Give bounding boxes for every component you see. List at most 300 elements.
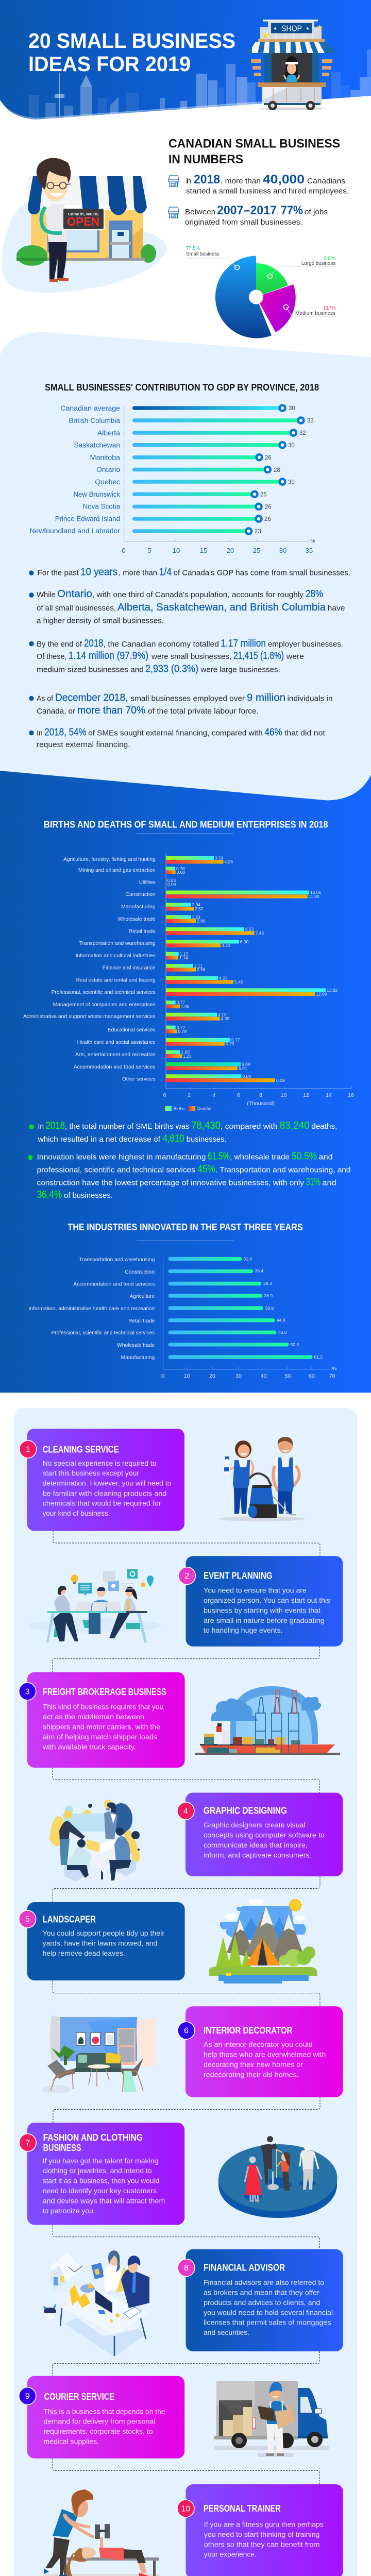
card text: business by starting with events that (204, 1606, 321, 1614)
bar chart: GDP by province: 5 (147, 547, 151, 554)
bar chart: births and deaths: 2 (188, 1092, 191, 1098)
card text: help those who are overwhelmed with (204, 2050, 326, 2058)
card text: requirements, corporate stocks, to (43, 2428, 153, 2435)
number badge 10 (177, 2500, 194, 2517)
illustration: man with open sign at store (2, 158, 167, 293)
bar chart: GDP by province: 26 (264, 516, 271, 522)
bullet: GDP from small businesses: of Canada's GDP has come from small businesses. (174, 568, 350, 577)
card text (204, 2279, 333, 2336)
card text: Graphic designers create visual (204, 1821, 305, 1829)
card text: inform, and captivate consumers. (204, 1851, 311, 1859)
bullet: external financing: 2018, 54% (44, 726, 87, 738)
card text: redecorating their old homes. (204, 2071, 299, 2078)
number badge 4 (177, 1802, 194, 1820)
bullet: innovation levels: construction have the lowest percentage of innovative businesses, with only (37, 1179, 305, 1187)
bar chart: GDP by province: 30 (289, 405, 295, 412)
bar chart: births and deaths: 5.91 (239, 1065, 247, 1071)
card title: INTERIOR DECORATOR (204, 2025, 293, 2036)
bullet: employer businesses: were large businesses. (200, 666, 280, 674)
bullet: SME births and deaths: , compared with (221, 1122, 278, 1131)
legend: small business: 77.5% (186, 245, 200, 251)
bullet: GDP from small businesses: 10 years (80, 566, 117, 578)
bar chart: births and deaths: (Thousand) (247, 1100, 275, 1107)
bar chart: GDP by province: 0 (122, 547, 126, 554)
card text: to handling huge events. (204, 1626, 282, 1634)
bullet: external financing: 46% (264, 726, 282, 738)
bullet: SME births and deaths: deaths, (311, 1122, 337, 1131)
bar chart: births and deaths: 12 (303, 1092, 309, 1098)
legend: births and deaths: Deaths (197, 1106, 211, 1111)
bar chart: births and deaths: 0.77 (231, 1037, 240, 1042)
card text: medical supplies. (43, 2438, 99, 2446)
text: 2018 stat: Canadians (307, 177, 345, 185)
text: 2007-2017 stat: 2007–2017 (217, 204, 277, 217)
bullet: external financing: In (37, 728, 43, 737)
bullet: innovation levels: Innovation levels were highest in manufacturing (37, 1153, 206, 1162)
bar chart: industries innovated: 44.9 (277, 1318, 285, 1323)
bar chart: births and deaths: Finance and insurance (103, 965, 156, 971)
text: 2007-2017 stat: 77% (281, 204, 303, 217)
bullet: Ontario density: While (37, 590, 56, 599)
bar chart: births and deaths: Administrative and support waste management services (23, 1013, 156, 1020)
bar chart: births and deaths: 1.15 (180, 951, 189, 956)
number badge 8 (178, 2259, 195, 2277)
bullet: innovation levels: of businesses. (64, 1191, 113, 1200)
bullet: employment (29, 692, 333, 716)
bar chart: births and deaths: 6.04 (242, 1062, 250, 1067)
bar chart: GDP by province: 32 (299, 430, 306, 436)
bar chart: industries innovated: Construction (125, 1269, 155, 1275)
bar chart: births and deaths: 0.04 (167, 882, 176, 887)
heading: Canadian small business in numbers: CANADIAN SMALL BUSINESS (168, 137, 340, 150)
bar chart: industries innovated: Manufacturing (121, 1354, 155, 1361)
bar chart: births and deaths: 4.39 (221, 1016, 229, 1021)
skyline (0, 49, 371, 120)
bar chart: industries innovated: 38.9 (264, 1293, 273, 1298)
bullet: innovation levels: , wholesale trade (230, 1153, 290, 1162)
text: 2007-2017 stat: originated from small businesses. (185, 218, 302, 227)
bullet: employment: small businesses employed over (131, 694, 245, 703)
number badge 10: 10 (181, 2505, 191, 2513)
bar chart: births and deaths: 7.43 (256, 930, 264, 936)
number badge 5: 5 (25, 1916, 30, 1924)
bar chart: births and deaths: Real estate and rental and leasing (76, 977, 156, 984)
bar chart: births and deaths: 2.52 (195, 906, 204, 911)
heading: industries innovated: THE INDUSTRIES INNOVATED IN THE PAST THREE YEARS (68, 1222, 303, 1232)
text: 2018 stat: , more than (221, 177, 261, 185)
bar chart: births and deaths: Agriculture, forestry, fishing and hunting (63, 856, 156, 862)
card text: If you have got the talent for making (43, 2157, 159, 2165)
bullet: innovation levels: 50.5% (292, 1151, 317, 1162)
bullet: employer businesses: Of these, (37, 652, 67, 661)
card text: as brokers and mean that they offer (204, 2289, 320, 2296)
bullet: employer businesses: medium-sized businesses and (37, 666, 144, 674)
card title: PERSONAL TRAINER (204, 2503, 281, 2514)
bullet: external financing: request external financing. (37, 740, 130, 749)
card text: determination. However, you will need to (43, 1480, 171, 1487)
text: 2018 stat: In (186, 177, 191, 185)
bullet: Ontario density: have (328, 604, 345, 613)
bullet: SME births and deaths: In (38, 1122, 44, 1131)
heading: births and deaths: BIRTHS AND DEATHS OF SMALL AND MEDIUM ENTERPRISES IN 2018 (44, 819, 328, 829)
bar chart: GDP by province: 15 (200, 547, 207, 554)
illustration: graphic design team (49, 1800, 140, 1882)
bullet: employer businesses: 2,933 (0.3%) (145, 664, 198, 675)
bar chart: births and deaths: Mining and oil and gas extraction (78, 867, 156, 873)
number badge 6: 6 (184, 2027, 189, 2036)
card text: demand for delivery from personal (43, 2417, 156, 2426)
card title: GRAPHIC DESIGNING (204, 1805, 287, 1816)
bullet: innovation levels: 36.4% (37, 1189, 62, 1200)
card text: with available truck capacity. (42, 1743, 136, 1751)
bar chart: births and deaths: Accommodation and food services (74, 1064, 156, 1070)
card text: are small in nature before graduating (204, 1617, 325, 1624)
text: 2007-2017 stat: , (277, 208, 279, 216)
number badge 3: 3 (25, 1687, 30, 1696)
card text: shippers and motor carriers, with the (43, 1723, 160, 1731)
bar chart: GDP by province: 33 (307, 418, 314, 424)
bar chart: GDP by province: Prince Edward Island (55, 515, 120, 522)
bar chart: industries innovated: Retail trade (128, 1318, 155, 1324)
bar chart: births and deaths: Educational services (108, 1027, 156, 1033)
card title: CLEANING SERVICE (43, 1445, 119, 1455)
bar chart: births and deaths: 1.06 (181, 1049, 190, 1055)
illustration: freight port with ship and cranes (195, 1686, 340, 1755)
number badge 9 (19, 2387, 36, 2405)
legend: large business: 8.8% (324, 256, 335, 262)
bullet: SME births and deaths (29, 1120, 337, 1144)
legend: large business (301, 256, 335, 266)
bar chart: industries innovated: 45.0 (278, 1330, 287, 1335)
bar chart: births and deaths: 2.04 (192, 902, 200, 907)
bullet: external financing: of SMEs sought external financing, compared with (88, 728, 263, 737)
number badge 1 (20, 1440, 37, 1458)
card text: help remove dead leaves. (43, 1950, 125, 1957)
bullet: Ontario density: Ontario (57, 588, 92, 600)
bar chart: GDP by province: Saskatchewan (74, 441, 120, 449)
card text: licenses that permit sales of mortgages (204, 2319, 331, 2327)
card 7: fashion and clothing (19, 2123, 184, 2225)
card text: to patronize you. (43, 2207, 95, 2215)
legend: medium business: Medium business (295, 310, 335, 316)
bar chart: births and deaths: 14 (326, 1092, 332, 1098)
bar chart: births and deaths: 1.23 (183, 1054, 192, 1059)
bar chart: births and deaths: 0.80 (176, 870, 185, 875)
header banner (0, 0, 371, 120)
bar chart: births and deaths: Information and cultural industries (76, 953, 156, 959)
bar chart: births and deaths: 0.79 (178, 1029, 187, 1034)
bar chart: GDP by province (30, 404, 315, 554)
bar chart: industries innovated: 50.5 (291, 1342, 299, 1347)
bar chart: births and deaths: 4.30 (222, 943, 230, 948)
card title: FINANCIAL ADVISOR (204, 2262, 285, 2273)
card text: be familiar with cleaning products and (43, 1489, 166, 1497)
bullet: employment: December 2018, (55, 692, 128, 703)
icon: store 1 (168, 176, 179, 187)
card title (43, 2132, 143, 2153)
card text: need to identify your key customers (43, 2187, 157, 2195)
bar chart: industries innovated: 40 (261, 1373, 267, 1379)
bullet: employer businesses: employer businesses. (268, 640, 343, 649)
text: 2018 stat: started a small business and hired employees. (186, 187, 349, 196)
bullet: innovation levels: and (319, 1153, 333, 1162)
illustration: landscape with tent (209, 1899, 317, 1984)
card text: This is a business that depends on the (43, 2408, 165, 2415)
card text: communicate ideas that inspire, (204, 1841, 308, 1849)
bullet: employer businesses: By the end of (37, 640, 82, 649)
title: IDEAS FOR 2019 (28, 52, 191, 76)
bullet: employment: 9 million (247, 692, 285, 703)
bullet: employer businesses: 21,415 (1.8%) (233, 650, 284, 662)
card title: EVENT PLANNING (204, 1571, 272, 1581)
card 4: graphic designing (177, 1793, 343, 1876)
bullet: SME births and deaths: businesses. (187, 1135, 227, 1144)
bar chart: births and deaths: 6 (237, 1092, 240, 1098)
bar chart: industries innovated: 30 (235, 1373, 242, 1379)
text: 2018 stat: 40,000 (263, 173, 305, 187)
bullet: employment: As of (37, 694, 54, 703)
bullet: innovation levels: professional, scientific and technical services (37, 1166, 195, 1175)
illustration: living room (42, 2015, 156, 2093)
bar chart: GDP by province: 23 (255, 529, 261, 535)
bar chart: GDP by province: 10 (173, 547, 180, 554)
bar chart: GDP by province: Manitoba (90, 453, 121, 462)
bar chart: births and deaths: 0 (163, 1092, 166, 1098)
bar chart: births and deaths (23, 853, 354, 1111)
legend: medium business (295, 305, 335, 316)
bar chart: births and deaths: Arts, entertainment and recreation (75, 1052, 156, 1058)
card text (43, 2408, 165, 2446)
bullet: Ontario density (29, 588, 345, 625)
legend: births and deaths (165, 1106, 211, 1111)
bar chart: GDP by province: 26 (265, 455, 272, 461)
number badge 8: 8 (184, 2264, 189, 2273)
bullet: Ontario density: Alberta, Saskatchewan, and British Columbia (117, 602, 326, 613)
bar chart: births and deaths: Other services (122, 1076, 156, 1082)
bar chart: industries innovated: Accommodation and food services (73, 1281, 155, 1287)
illustration: tailor on platform (218, 2136, 337, 2218)
title (28, 29, 235, 76)
bar chart: GDP by province: Ontario (96, 466, 120, 473)
bar chart: births and deaths: 13.82 (327, 988, 338, 993)
bullet: employer businesses: were (286, 652, 304, 661)
bar chart: births and deaths: 12.69 (316, 991, 327, 996)
title: 20 SMALL BUSINESS (28, 29, 235, 53)
card text (43, 1460, 171, 1517)
bar chart: industries innovated: 61.5 (314, 1354, 323, 1360)
card text: clothing or jewelries, and intend to (43, 2167, 152, 2175)
bar chart: GDP by province: Quebec (95, 478, 120, 486)
bar chart: GDP by province: Canadian average (60, 404, 120, 412)
card text: start this business except your (43, 1469, 140, 1477)
illustration: man with open sign at store: Come in, WE'RE (68, 212, 99, 216)
bar chart: births and deaths: Professional, scientific and technical services (52, 989, 156, 995)
card text: start it as a business, then you would (43, 2177, 159, 2185)
card 1: cleaning service (20, 1429, 184, 1531)
bar chart: births and deaths: 0.09 (276, 1078, 285, 1083)
bar chart: industries innovated: % (332, 1366, 337, 1372)
bullet: Ontario density: a higher density of small businesses. (37, 616, 164, 625)
text: 2018 stat: 2018 (194, 173, 220, 187)
bullet: SME births and deaths: 83,240 (280, 1120, 310, 1131)
bullet: Ontario density: of all small businesses, (37, 604, 116, 613)
bar chart: industries innovated: Agriculture (130, 1293, 155, 1299)
bullet: SME births and deaths: which resulted in a net decrease of (37, 1135, 161, 1144)
bullet: GDP from small businesses: For the past (37, 568, 79, 577)
card text: concepts using computer software to (204, 1832, 325, 1839)
bar chart: industries innovated: Information, administrative health care and recreation (29, 1306, 155, 1312)
bar chart: industries innovated: 10 (184, 1373, 190, 1379)
bar chart: industries innovated: 50 (285, 1373, 291, 1379)
card text: and securities. (204, 2329, 249, 2336)
pie chart (186, 245, 335, 338)
bar chart: GDP by province: 30 (288, 443, 295, 449)
bar chart: births and deaths: 0.77 (177, 1000, 185, 1005)
bar chart: industries innovated: 70 (329, 1373, 335, 1379)
bullet: employment: more than 70% (77, 705, 146, 716)
bar chart: births and deaths: 5.45 (234, 979, 243, 985)
bullet: employer businesses: 1.17 million (221, 638, 266, 649)
bullet: SME births and deaths: , the total number of SME births was (65, 1122, 189, 1131)
bar chart: births and deaths: 6.00 (240, 939, 249, 944)
number badge 3 (19, 1683, 36, 1700)
card text: and devise ways that will attract them (43, 2197, 165, 2205)
card text: decorating their new homes or (204, 2061, 303, 2069)
card 2: event planning (178, 1556, 343, 1647)
card text: your experience. (204, 2551, 257, 2558)
bar chart: births and deaths: 4.26 (225, 859, 233, 865)
card 10: personal trainer (177, 2484, 343, 2576)
connectors between idea cards (53, 1531, 320, 2576)
bullet: employer businesses (29, 638, 343, 675)
bar chart: births and deaths: 0.03 (167, 878, 176, 883)
bullet: GDP from small businesses (29, 566, 350, 578)
number badge 7 (19, 2134, 36, 2151)
bar chart: GDP by province: 20 (227, 547, 234, 554)
card text: others so that they can benefit from (204, 2540, 319, 2548)
bar chart: births and deaths: 10 (281, 1092, 287, 1098)
bar chart: industries innovated: Professional, scientific and technical services (52, 1330, 155, 1336)
card text: you need to start thinking of training (204, 2531, 319, 2538)
bullet: innovation levels: 45% (197, 1164, 215, 1175)
icon: shop kiosk: SHOP (281, 25, 302, 33)
bar chart: births and deaths: 2.01 (192, 914, 201, 920)
card 9: courier service (19, 2376, 184, 2459)
bar chart: industries innovated: 39.9 (265, 1306, 274, 1311)
card title: BUSINESS (43, 2143, 81, 2153)
number badge 2 (178, 1567, 195, 1585)
card text (42, 1703, 163, 1751)
bullet: GDP from small businesses: 1/4 (159, 566, 172, 578)
bar chart: GDP by province: 30 (288, 479, 295, 485)
bar chart: industries innovated: 0 (161, 1373, 164, 1379)
bullet: GDP from small businesses: , more than (119, 568, 157, 577)
bar chart: births and deaths: 2.86 (197, 918, 206, 923)
card title: COURIER SERVICE (44, 2392, 114, 2402)
bar chart: GDP by province: Nova Scotia (82, 503, 120, 510)
bar chart: industries innovated: 38.3 (263, 1281, 272, 1286)
bar chart: births and deaths: 2.56 (197, 967, 206, 972)
text: 2018 stat (186, 173, 349, 196)
bar chart: GDP by province: 26 (265, 504, 272, 510)
illustration: financial advisors at desk (43, 2250, 149, 2357)
bullet: Ontario density: 28% (306, 588, 323, 600)
panel: 20 ideas background (14, 1408, 357, 2576)
bullet: innovation levels: 31% (306, 1177, 321, 1188)
heading: Canadian small business in numbers: IN NUMBERS (168, 152, 243, 166)
bullet: employer businesses: 2018 (84, 638, 104, 649)
card text: aim of helping match shipper loads (43, 1733, 157, 1741)
bullet: Ontario density: , with one third of Canada's population, accounts for roughly (92, 590, 304, 599)
card 8: financial advisor (178, 2249, 343, 2351)
card text (43, 2157, 165, 2215)
bullet: employment: Canada, or (37, 707, 75, 716)
bullet: SME births and deaths: 78,430 (191, 1120, 221, 1131)
bar chart: GDP by province: 25 (260, 492, 267, 498)
illustration: event planners at table (29, 1569, 161, 1642)
bar chart: births and deaths: 8.08 (242, 1074, 251, 1079)
bar chart: industries innovated: 20 (209, 1373, 215, 1379)
bar chart: births and deaths: 1.05 (181, 1004, 190, 1009)
illustration: man with open sign at store: OPEN (67, 215, 99, 228)
bar chart: births and deaths: 4.13 (218, 1012, 227, 1017)
bullet: external financing (29, 726, 326, 749)
card text (204, 2041, 326, 2078)
card text: act as the middleman between (43, 1713, 144, 1721)
bar chart: births and deaths: 6.53 (245, 927, 254, 932)
bar chart: GDP by province: Newfoundland and Labrador (30, 527, 121, 535)
bar chart: births and deaths: 0.79 (226, 1041, 234, 1046)
bar chart: births and deaths: 1.14 (179, 955, 188, 960)
number badge 7: 7 (25, 2139, 30, 2147)
number badge 6 (178, 2022, 195, 2039)
bar chart: GDP by province: British Columbia (69, 417, 120, 425)
bar chart: births and deaths: Wholesale trade (117, 916, 156, 922)
bullet: employer businesses: were small businesses, (151, 652, 231, 661)
bar chart: GDP by province: 35 (306, 547, 313, 554)
bar chart: industries innovated (29, 1256, 337, 1379)
card 6: interior decorator (178, 2006, 343, 2097)
card text (204, 1586, 330, 1634)
bullet: employment: individuals in (288, 694, 333, 703)
legend: births and deaths: Births (174, 1106, 184, 1111)
legend: large business: Large business (301, 260, 335, 266)
bullet: SME births and deaths: 4,810 (163, 1133, 184, 1144)
bar chart: births and deaths: 16 (348, 1092, 354, 1098)
bar chart: births and deaths: Management of companies and enterprises (53, 1002, 156, 1008)
bar chart: births and deaths: 3.59 (215, 855, 224, 860)
bullet: employer businesses: 1.14 million (97.9%) (69, 650, 148, 662)
bar chart: industries innovated: Wholesale trade (117, 1342, 155, 1348)
bar chart: industries innovated: 31.0 (243, 1256, 252, 1261)
legend: small business (186, 245, 220, 257)
heading: Canadian small business in numbers (168, 137, 340, 166)
bullet: innovation levels: . Transportation and warehousing, and (215, 1166, 350, 1175)
illustration: trainer and woman on bench (43, 2489, 160, 2576)
illustration: cleaners with vacuum (218, 1437, 305, 1521)
bar chart: GDP by province: Alberta (97, 429, 120, 437)
bar chart: GDP by province: New Brunswick (73, 490, 120, 498)
number badge 5 (19, 1910, 36, 1928)
number badge 4: 4 (183, 1807, 188, 1816)
bar chart: births and deaths: Retail trade (129, 928, 156, 935)
number badge 2: 2 (184, 1572, 189, 1581)
card text: As an interior decorator you could (204, 2041, 313, 2048)
bar chart: industries innovated: Transportation and warehousing (79, 1257, 155, 1263)
bar chart: births and deaths: 8 (259, 1092, 262, 1098)
number badge 1: 1 (26, 1446, 30, 1454)
panel: births and deaths background (0, 768, 371, 1393)
